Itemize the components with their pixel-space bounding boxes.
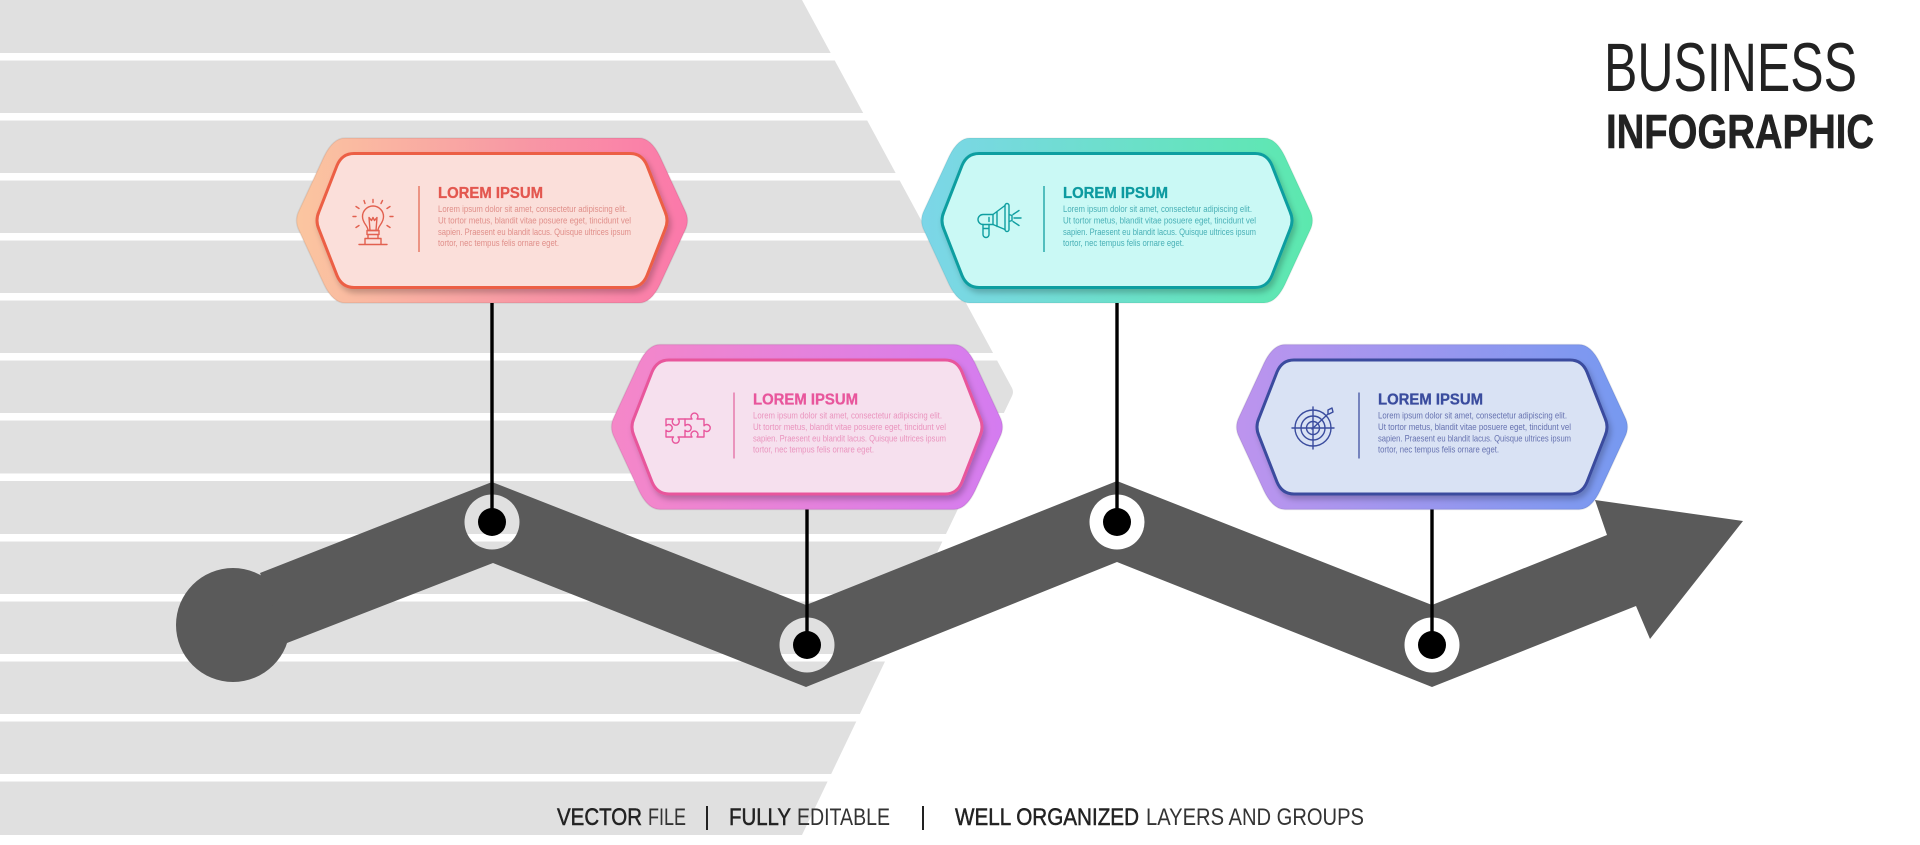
icon: light bulb xyxy=(353,200,393,244)
icon: target xyxy=(1292,407,1334,449)
body text xyxy=(1063,204,1256,248)
body text xyxy=(753,410,946,454)
body text: Lorem ipsum dolor sit amet, consectetur adipiscing elit. xyxy=(438,204,627,214)
footer caption: FULLY xyxy=(729,804,791,831)
panel: step 1 orange xyxy=(296,138,688,303)
heading: LOREM IPSUM xyxy=(1378,392,1483,408)
footer caption: EDITABLE xyxy=(797,804,890,831)
zigzag arrow with start circle and ring holes xyxy=(176,481,1743,687)
body text: sapien. Praesent eu blandit lacus. Quisque ultrices ipsum xyxy=(753,434,946,444)
icon: megaphone xyxy=(978,204,1021,238)
body text: sapien. Praesent eu blandit lacus. Quisque ultrices ipsum xyxy=(438,227,631,237)
body text: Ut tortor metus, blandit vitae posuere eget, tincidunt vel xyxy=(438,216,631,226)
body text: sapien. Praesent eu blandit lacus. Quisque ultrices ipsum xyxy=(1378,434,1571,444)
body text: tortor, nec tempus felis ornare eget. xyxy=(1378,444,1499,454)
icon: puzzle xyxy=(666,413,710,443)
footer caption xyxy=(557,804,1364,831)
divider xyxy=(418,186,420,252)
panel: step 2 pink xyxy=(612,344,1002,510)
panel: step 4 blue xyxy=(1236,344,1628,510)
body text: Ut tortor metus, blandit vitae posuere eget, tincidunt vel xyxy=(1063,216,1256,226)
heading: LOREM IPSUM xyxy=(438,185,543,202)
heading: LOREM IPSUM xyxy=(1063,185,1168,202)
body text: Lorem ipsum dolor sit amet, consectetur adipiscing elit. xyxy=(753,410,942,420)
footer caption: WELL ORGANIZED xyxy=(955,804,1139,831)
footer caption: LAYERS AND GROUPS xyxy=(1146,804,1364,831)
body text: Lorem ipsum dolor sit amet, consectetur adipiscing elit. xyxy=(1378,410,1567,420)
body text: sapien. Praesent eu blandit lacus. Quisque ultrices ipsum xyxy=(1063,227,1256,237)
body text xyxy=(438,204,631,248)
divider xyxy=(1043,186,1045,252)
connector 1 xyxy=(478,300,506,536)
body text: tortor, nec tempus felis ornare eget. xyxy=(753,444,874,454)
connector 2 xyxy=(793,505,821,659)
connector 4 xyxy=(1418,505,1446,659)
footer caption: FILE xyxy=(648,804,686,831)
body text: tortor, nec tempus felis ornare eget. xyxy=(1063,238,1184,248)
body text: tortor, nec tempus felis ornare eget. xyxy=(438,238,559,248)
body text xyxy=(1378,410,1571,454)
body text: Ut tortor metus, blandit vitae posuere eget, tincidunt vel xyxy=(753,422,946,432)
connector 3 xyxy=(1103,300,1131,536)
panel: step 3 teal xyxy=(922,138,1312,303)
background: striped grey arrow shape xyxy=(0,0,1100,835)
body text: Ut tortor metus, blandit vitae posuere eget, tincidunt vel xyxy=(1378,422,1571,432)
divider xyxy=(1358,392,1360,458)
footer caption: VECTOR xyxy=(557,804,642,831)
body text: Lorem ipsum dolor sit amet, consectetur adipiscing elit. xyxy=(1063,204,1252,214)
title xyxy=(1604,29,1874,159)
heading: LOREM IPSUM xyxy=(753,392,858,408)
divider xyxy=(733,392,735,458)
